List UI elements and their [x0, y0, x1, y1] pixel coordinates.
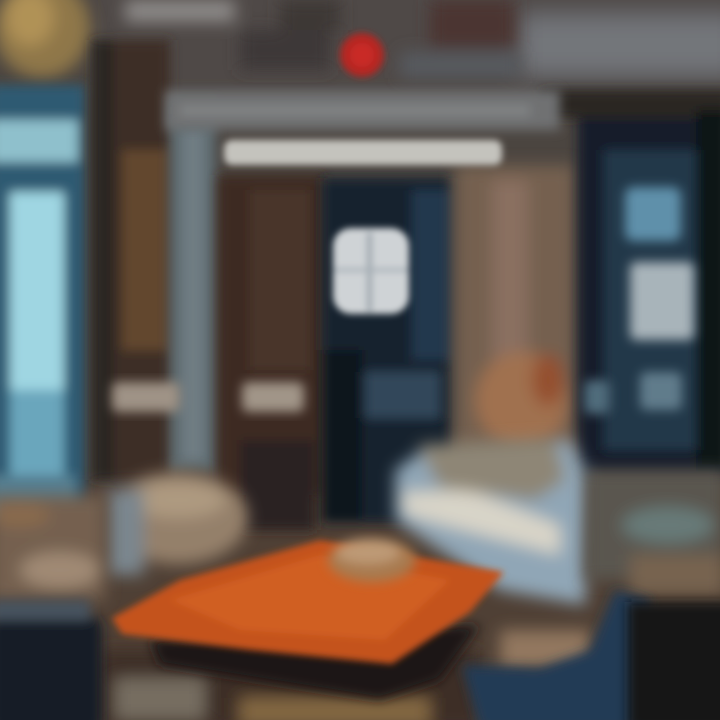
ceiling details: [125, 0, 520, 78]
left window: [0, 85, 85, 520]
bright ceiling band: [224, 140, 502, 165]
door window: [333, 228, 409, 314]
cabinet light panels: [584, 187, 694, 414]
right chair and table: [585, 470, 720, 595]
dish on table: [328, 538, 416, 582]
white sofa right: [395, 438, 590, 605]
tan wall: [455, 165, 575, 455]
dark right cabinet: [540, 90, 720, 475]
left side table and objects: [0, 495, 105, 600]
dark armchair bottom left: [0, 600, 102, 720]
dark navy door: [322, 178, 452, 523]
wall sconces: [112, 382, 304, 412]
dark corner bottom right: [628, 602, 720, 720]
armchair left: [108, 472, 248, 575]
orange table top: [112, 540, 504, 664]
blue armchair bottom right: [462, 590, 650, 720]
brown centre panel: [218, 175, 324, 530]
dark table base: [150, 625, 480, 700]
floor and lower area: [100, 630, 590, 720]
ceiling and background walls: [95, 0, 720, 660]
gold ceiling lamp: [0, 0, 90, 78]
grey ceiling beam: [165, 90, 560, 130]
brown column: [92, 40, 170, 480]
red ceiling lamp: [340, 33, 384, 77]
grey column: [170, 100, 216, 470]
